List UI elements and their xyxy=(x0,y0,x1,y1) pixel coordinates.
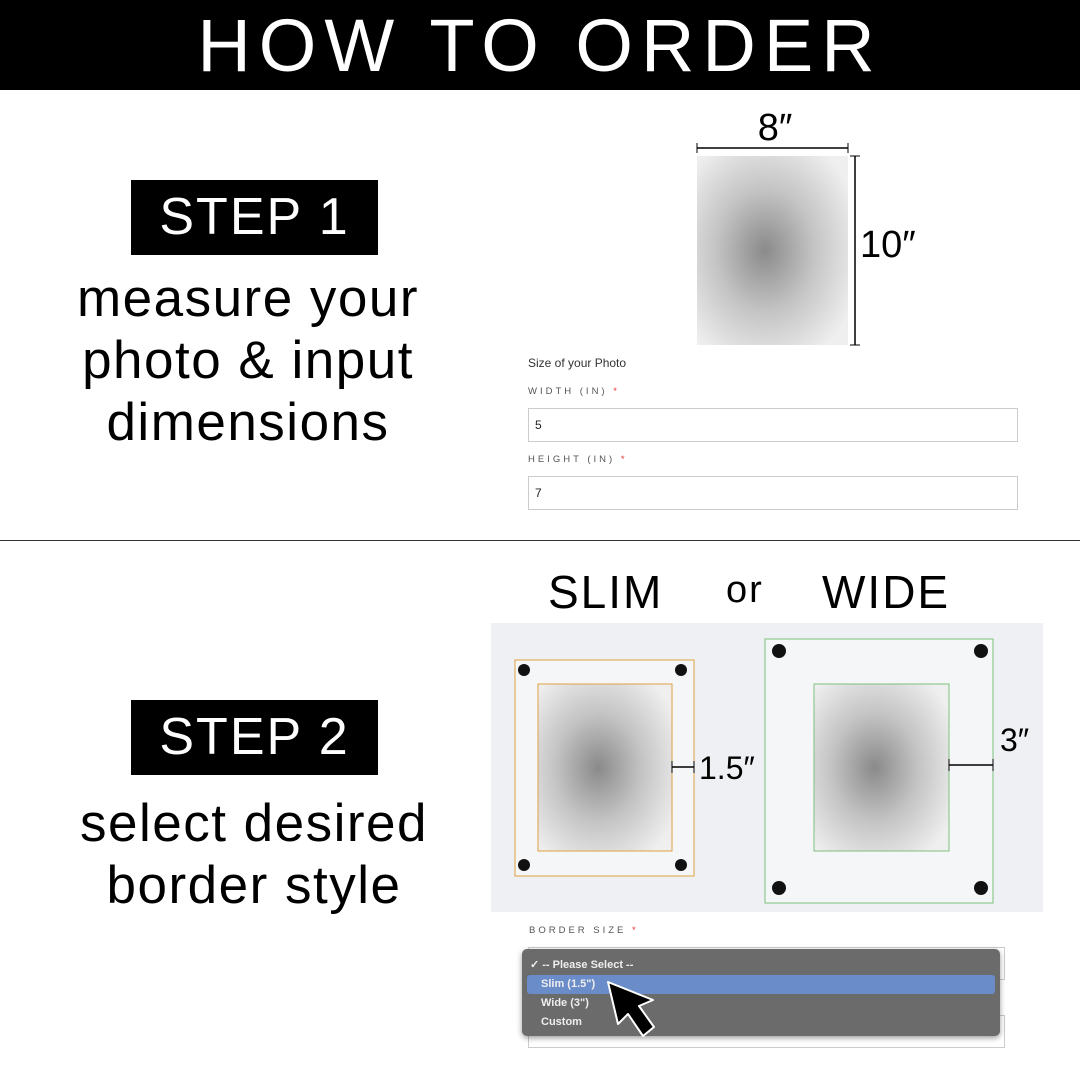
photo with dimensions: 10″ xyxy=(860,224,916,266)
step 2 text: border style xyxy=(107,856,401,915)
frames illustration: 1.5″ xyxy=(699,750,755,786)
step 1 text: photo & input xyxy=(82,331,414,390)
step 1 badge: STEP 1 xyxy=(159,188,350,246)
border size label: BORDER SIZE * xyxy=(529,925,639,936)
slim or wide headings: SLIM xyxy=(548,566,663,618)
header: HOW TO ORDER xyxy=(197,4,883,87)
step 1 text xyxy=(77,269,419,452)
step 1 text: measure your xyxy=(77,269,419,328)
dropdown: Wide (3") xyxy=(541,997,589,1009)
icon: cursor arrow xyxy=(607,981,655,1037)
step 2 badge xyxy=(131,700,378,775)
step 2 text xyxy=(80,794,428,915)
step 2 badge: STEP 2 xyxy=(159,708,350,766)
dropdown: Custom xyxy=(541,1016,582,1028)
form step 1: 5 xyxy=(535,418,542,432)
dropdown xyxy=(518,947,1005,1048)
form step 1: Size of your Photo xyxy=(528,356,626,370)
form step 1: 7 xyxy=(535,486,542,500)
form step 1 xyxy=(528,356,1018,510)
slim or wide headings: WIDE xyxy=(822,566,950,618)
slim or wide headings xyxy=(548,566,950,618)
dropdown: Slim (1.5") xyxy=(541,978,595,990)
step 1 text: dimensions xyxy=(106,393,390,452)
step 2 text: select desired xyxy=(80,794,428,853)
form step 1: HEIGHT (IN) * xyxy=(528,454,628,465)
step 1 badge xyxy=(131,180,378,255)
frames illustration: 3″ xyxy=(1000,722,1029,758)
photo with dimensions xyxy=(696,107,916,346)
dropdown: ✓ -- Please Select -- xyxy=(530,959,633,971)
frames illustration xyxy=(491,623,1043,912)
slim or wide headings: or xyxy=(726,569,764,611)
form step 1: WIDTH (IN) * xyxy=(528,386,620,397)
photo with dimensions: 8″ xyxy=(758,107,792,149)
header xyxy=(0,0,1080,90)
